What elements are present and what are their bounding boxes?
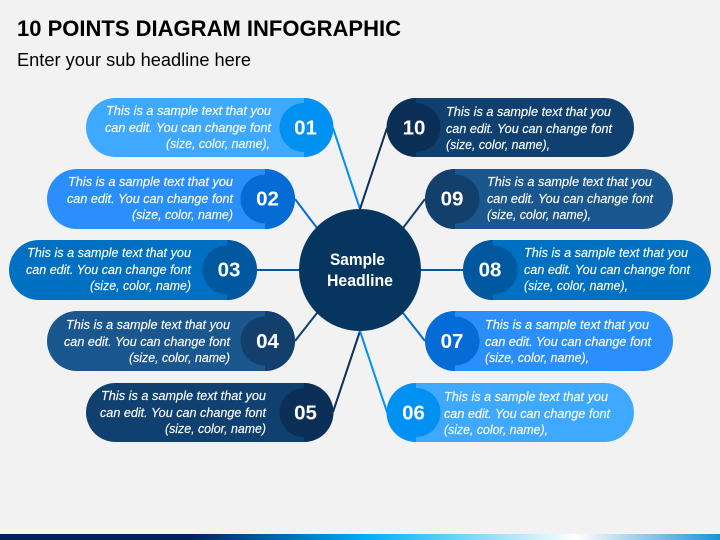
item 03: (size, color, name) <box>90 278 191 293</box>
item 03: can edit. You can change font <box>26 262 192 277</box>
central circle: Sample Headline: Headline <box>327 272 393 290</box>
central circle: Sample Headline <box>299 209 421 331</box>
item 04: 04 <box>256 330 279 353</box>
item 05: (size, color, name) <box>165 421 266 436</box>
item 05: 05 <box>294 402 317 424</box>
item 02 <box>47 169 295 229</box>
item 10: can edit. You can change font <box>446 121 613 136</box>
item 06 <box>386 383 634 442</box>
subtitle: Enter your sub headline here <box>17 49 251 70</box>
item 05: can edit. You can change font <box>100 405 267 420</box>
item 05 <box>86 383 334 442</box>
connector lines <box>257 128 463 412</box>
bottom gradient bar <box>0 534 720 540</box>
item 01: 01 <box>294 116 317 140</box>
item 08: This is a sample text that you <box>524 245 688 260</box>
item 01: (size, color, name), <box>166 136 270 151</box>
item 03: 03 <box>218 258 240 282</box>
item 09: (size, color, name), <box>487 207 591 222</box>
item 06: This is a sample text that you <box>444 389 608 404</box>
item 08: 08 <box>479 258 501 282</box>
item 01: This is a sample text that you <box>106 103 271 118</box>
item 10 <box>386 98 634 157</box>
item 07 <box>425 311 673 371</box>
item 02: This is a sample text that you <box>68 174 233 189</box>
item 06: can edit. You can change font <box>444 406 611 421</box>
item 06: (size, color, name), <box>444 422 548 437</box>
item 01 <box>86 98 334 157</box>
item 02: 02 <box>256 188 279 210</box>
item 09: This is a sample text that you <box>487 174 652 189</box>
item 03 <box>9 240 257 300</box>
item 08: can edit. You can change font <box>524 262 691 277</box>
item 10: (size, color, name), <box>446 137 550 152</box>
item 09: 09 <box>441 188 463 210</box>
item 02: (size, color, name) <box>132 207 233 222</box>
item 07: 07 <box>441 330 463 353</box>
item 02: can edit. You can change font <box>67 191 234 206</box>
item 04: (size, color, name) <box>129 350 230 365</box>
item 04: This is a sample text that you <box>66 317 230 332</box>
item 10: 10 <box>403 116 425 140</box>
item 04: can edit. You can change font <box>64 334 231 349</box>
title: 10 POINTS DIAGRAM INFOGRAPHIC <box>17 16 401 41</box>
item 08 <box>463 240 711 300</box>
item 07: This is a sample text that you <box>485 317 649 332</box>
item 10: This is a sample text that you <box>446 104 611 119</box>
item 05: This is a sample text that you <box>101 388 266 403</box>
item 06: 06 <box>402 402 425 424</box>
item 04 <box>47 311 295 371</box>
item 09 <box>425 169 673 229</box>
item 07: can edit. You can change font <box>485 334 652 349</box>
item 03: This is a sample text that you <box>27 245 191 260</box>
central circle: Sample Headline: Sample <box>330 251 385 269</box>
item 07: (size, color, name), <box>485 350 589 365</box>
item 09: can edit. You can change font <box>487 191 654 206</box>
item 08: (size, color, name), <box>524 278 628 293</box>
item 01: can edit. You can change font <box>105 120 272 135</box>
